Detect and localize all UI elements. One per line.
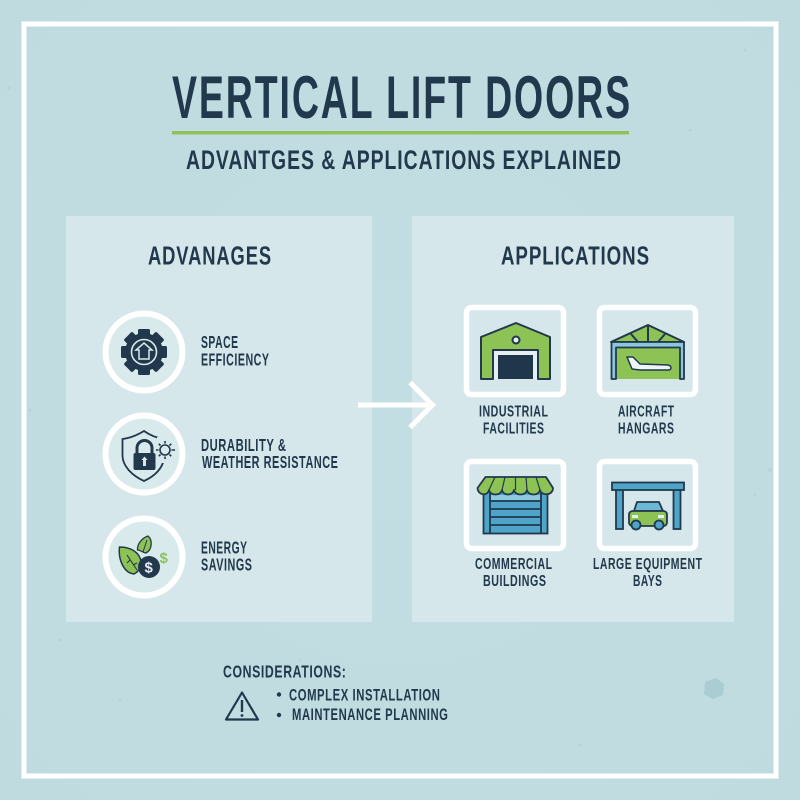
label: commercial buildings: COMMERCIAL <box>475 556 552 573</box>
subtitle: ADVANTGES & APPLICATIONS EXPLAINED <box>186 145 622 175</box>
label: industrial facilities <box>479 404 548 438</box>
icon: warning triangle <box>226 692 258 720</box>
considerations list: COMPLEX INSTALLATION <box>289 686 440 704</box>
text: space efficiency: SPACE <box>201 332 238 352</box>
icon: commercial building <box>466 462 564 548</box>
applications heading: APPLICATIONS <box>501 240 650 270</box>
panel: advantages <box>66 216 372 622</box>
label: industrial facilities: FACILITIES <box>483 420 544 438</box>
icon: aircraft hangar <box>600 308 696 394</box>
label: aircraft hangars <box>618 404 674 438</box>
label: aircraft hangars: AIRCRAFT <box>618 404 674 420</box>
text: energy savings: ENERGY <box>201 538 248 558</box>
text: space efficiency: EFFICIENCY <box>201 350 270 370</box>
label: large equipment bays: LARGE EQUIPMENT <box>593 556 702 573</box>
icon: large equipment bay <box>600 462 696 548</box>
icon: energy savings leaves and coin <box>106 518 182 596</box>
panel: applications <box>412 216 734 622</box>
advantages heading: ADVANAGES <box>148 240 272 270</box>
label: aircraft hangars: HANGARS <box>618 420 674 438</box>
label: large equipment bays <box>593 556 702 590</box>
text: durability and weather resistance: DURABILITY & <box>201 435 286 455</box>
icon: energy savings leaves and coin: $ <box>159 550 169 567</box>
icon: durability shield, lock and sun <box>106 416 182 492</box>
text: energy savings <box>201 538 252 574</box>
text: energy savings: SAVINGS <box>201 554 252 574</box>
considerations list: MAINTENANCE PLANNING <box>292 705 448 724</box>
icon: industrial facility <box>466 308 564 394</box>
considerations heading: CONSIDERATIONS: <box>223 662 346 682</box>
title underline <box>172 131 629 134</box>
icon: space efficiency gear <box>106 314 182 390</box>
considerations list <box>277 686 448 724</box>
arrow: advantages to applications <box>358 382 432 428</box>
label: commercial buildings: BUILDINGS <box>483 573 546 590</box>
label: large equipment bays: BAYS <box>633 573 662 590</box>
label: commercial buildings <box>475 556 552 590</box>
icon: energy savings leaves and coin: $ <box>144 560 154 576</box>
text: durability and weather resistance: WEATHER RESISTANCE <box>202 452 338 472</box>
text: durability and weather resistance <box>201 435 338 472</box>
label: industrial facilities: INDUSTRIAL <box>479 404 548 420</box>
text: space efficiency <box>201 332 270 370</box>
